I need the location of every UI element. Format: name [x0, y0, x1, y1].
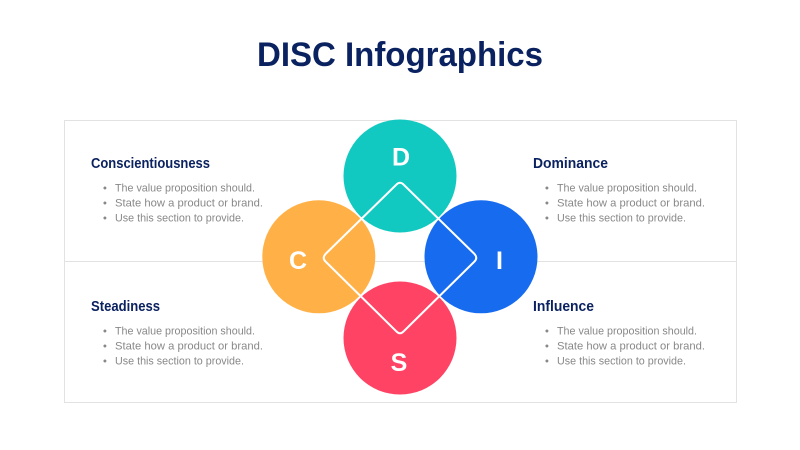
panel: steadiness: [91, 299, 263, 368]
bullet list: dominance: •: [545, 212, 549, 224]
bullet list: influence: The value proposition should.: [557, 326, 697, 338]
bullet list: dominance: The value proposition should.: [557, 182, 697, 194]
circle C: [262, 200, 375, 313]
circle S: S: [391, 349, 407, 377]
panel: conscientiousness: Conscientiousness: [91, 156, 210, 172]
bullet list: influence: •: [545, 356, 549, 368]
panel: influence: Influence: [533, 299, 594, 315]
bullet list: influence: Use this section to provide.: [557, 356, 686, 368]
bullet list: conscientiousness: State how a product or brand.: [115, 198, 263, 210]
bullet list: dominance: •: [545, 182, 549, 194]
circle C: C: [289, 247, 307, 275]
bullet list: conscientiousness: •: [103, 198, 107, 210]
bullet list: dominance: •: [545, 198, 549, 210]
title: DISC Infographics: [257, 36, 543, 74]
bullet list: steadiness: •: [103, 356, 107, 368]
panel: conscientiousness: [91, 156, 263, 224]
bullet list: influence: State how a product or brand.: [557, 340, 705, 352]
bullet list: steadiness: •: [103, 340, 107, 352]
bullet list: conscientiousness: •: [103, 182, 107, 194]
circle D: [344, 120, 456, 232]
bullet list: steadiness: State how a product or brand.: [115, 340, 263, 352]
diamond outline: [324, 183, 476, 333]
panel frame: [64, 120, 736, 402]
bullet list: conscientiousness: [103, 182, 263, 224]
circle D: D: [392, 144, 410, 172]
bullet list: dominance: [545, 182, 705, 224]
bullet list: influence: •: [545, 340, 549, 352]
bullet list: influence: [545, 326, 705, 368]
bullet list: conscientiousness: The value proposition should.: [115, 182, 255, 194]
bullet list: influence: •: [545, 326, 549, 338]
circle S: [344, 282, 456, 394]
bullet list: conscientiousness: •: [103, 212, 107, 224]
bullet list: steadiness: •: [103, 326, 107, 338]
circle I: I: [496, 247, 503, 275]
bullet list: conscientiousness: Use this section to provide.: [115, 212, 244, 224]
panel: steadiness: Steadiness: [91, 299, 160, 315]
bullet list: steadiness: The value proposition should.: [115, 326, 255, 338]
bullet list: steadiness: Use this section to provide.: [115, 356, 244, 368]
circle I: [424, 200, 538, 313]
panel: dominance: Dominance: [533, 156, 608, 172]
bullet list: dominance: State how a product or brand.: [557, 198, 705, 210]
bullet list: steadiness: [103, 326, 263, 368]
bullet list: dominance: Use this section to provide.: [557, 212, 686, 224]
panel: dominance: [533, 156, 705, 224]
panel: influence: [533, 299, 705, 368]
